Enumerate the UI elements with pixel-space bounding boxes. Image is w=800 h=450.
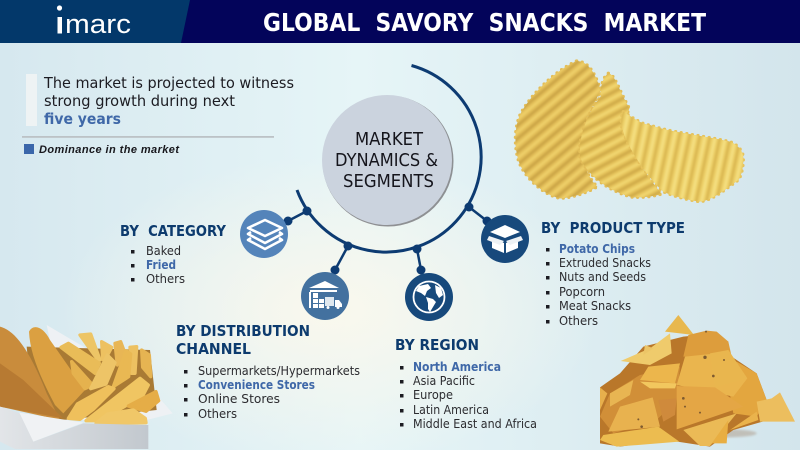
segment: by category: BY CATEGORY xyxy=(120,222,227,240)
segment: by region: Asia Pacific xyxy=(413,373,475,388)
segment: by product type: Meat Snacks xyxy=(559,298,631,313)
segment: by distribution channel: Others xyxy=(198,406,237,421)
segment: by product type: Nuts and Seeds xyxy=(559,269,646,284)
image: potato chips xyxy=(500,60,747,205)
segment: by distribution channel: Convenience Stores xyxy=(198,377,315,392)
segment: by category: Others xyxy=(146,271,185,286)
icon: warehouse and truck xyxy=(301,272,349,320)
segment: by region: Europe xyxy=(413,387,453,402)
connector: product type xyxy=(464,202,492,226)
segment: by product type: Extruded Snacks xyxy=(559,255,651,270)
segment: by region: Latin America xyxy=(413,402,489,417)
center circle: market dynamics and segments: SEGMENTS xyxy=(343,171,434,192)
segment: by region: BY REGION xyxy=(395,336,479,354)
connector: distribution channel xyxy=(330,242,352,274)
intro text block: The market is projected to witness xyxy=(43,74,294,92)
header banner xyxy=(0,0,800,43)
connector: category xyxy=(284,206,312,226)
intro text block: strong growth during next xyxy=(44,92,235,110)
segment: by product type: Popcorn xyxy=(559,284,605,299)
image: fries and fish in a box xyxy=(0,325,173,449)
segment: by distribution channel: CHANNEL xyxy=(176,340,251,358)
segment: by region: North America xyxy=(413,359,501,374)
center circle: market dynamics and segments xyxy=(322,95,454,226)
segment: by distribution channel: Online Stores xyxy=(198,391,280,406)
logo: imarc: marc xyxy=(65,9,131,39)
title: GLOBAL SAVORY SNACKS MARKET xyxy=(263,8,706,37)
segment: by distribution channel: BY DISTRIBUTION xyxy=(176,322,310,340)
legend: dominance in the market: Dominance in the market xyxy=(39,144,180,156)
center circle: market dynamics and segments: MARKET xyxy=(355,129,424,150)
segment: by category: Baked xyxy=(146,243,181,258)
intro text block xyxy=(26,74,294,128)
segment: by category xyxy=(120,222,227,286)
image: tortilla chips xyxy=(600,315,795,447)
segment: by product type: Others xyxy=(559,313,598,328)
segment: by product type: BY PRODUCT TYPE xyxy=(541,219,685,237)
segment: by product type: Potato Chips xyxy=(559,241,635,256)
icon: layers xyxy=(240,210,288,258)
connector: region xyxy=(412,244,426,274)
segment: by region xyxy=(395,336,537,431)
icon: product box xyxy=(481,215,529,263)
arc connector xyxy=(297,66,481,252)
center circle: market dynamics and segments: DYNAMICS & xyxy=(335,150,438,171)
segment: by category: Fried xyxy=(146,257,176,272)
icon: globe xyxy=(405,273,453,321)
intro text block: five years xyxy=(44,110,121,128)
segment: by product type xyxy=(541,219,685,328)
segment: by region: Middle East and Africa xyxy=(413,416,537,431)
segment: by distribution channel: Supermarkets/Hypermarkets xyxy=(198,363,360,378)
segment: by distribution channel xyxy=(176,322,360,421)
